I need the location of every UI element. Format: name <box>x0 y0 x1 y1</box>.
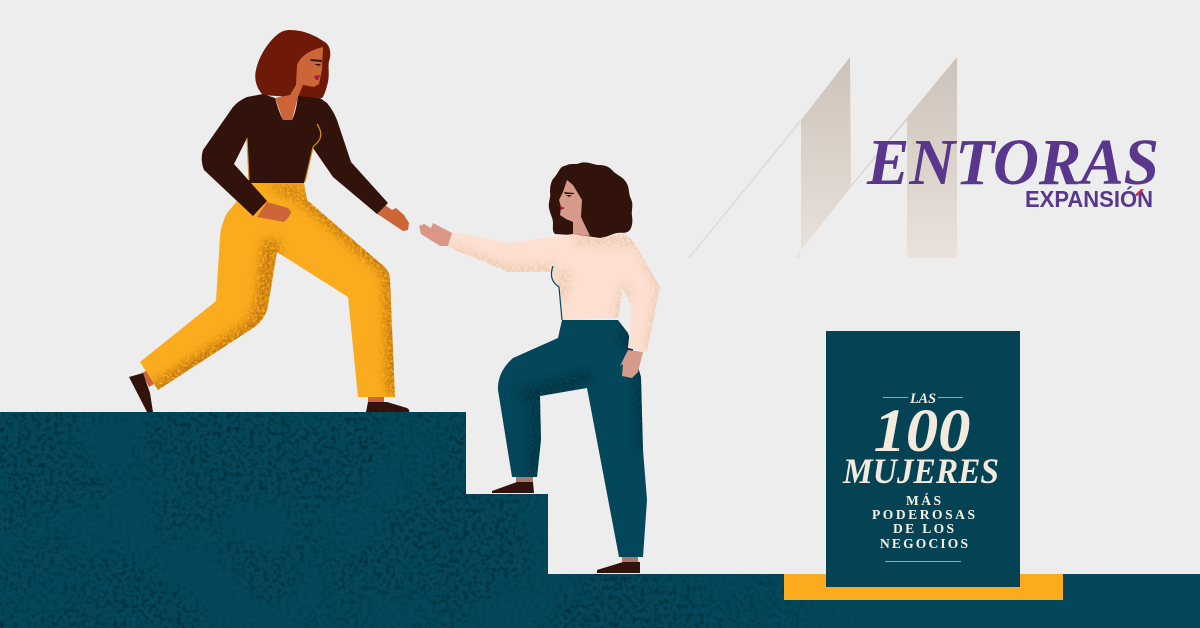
sweater speckle <box>450 240 662 350</box>
back shoe <box>129 373 153 412</box>
hair <box>549 162 632 238</box>
logo wordmark: EXPANSIÓN: EXPANSIÓN <box>1025 185 1153 212</box>
pants shading <box>520 330 645 478</box>
black top <box>202 94 388 216</box>
right hand <box>376 205 409 231</box>
card subtitle <box>872 493 975 551</box>
decorative rules <box>883 398 963 562</box>
card title: MUJERES: MUJERES <box>842 451 999 491</box>
logo monogram M <box>688 57 957 258</box>
logo wordmark: ENTORAS: ENTORAS <box>866 126 1159 199</box>
card subtitle: MÁS <box>906 493 941 508</box>
card title: 100: 100 <box>874 398 970 465</box>
card subtitle: PODEROSAS <box>872 507 975 522</box>
card subtitle: NEGOCIOS <box>880 536 968 551</box>
facial features <box>310 59 322 80</box>
face and neck <box>559 180 590 236</box>
left hand <box>257 202 291 222</box>
illustration: woman reaching down <box>419 162 662 573</box>
step shoe <box>492 482 534 493</box>
top seam lines <box>247 124 321 182</box>
pants shading <box>155 184 396 395</box>
sweater <box>448 232 660 352</box>
ankle front <box>516 477 533 483</box>
front shoe <box>366 402 409 412</box>
card subtitle: DE LOS <box>893 521 954 536</box>
pants <box>140 183 395 397</box>
face and neck <box>275 47 323 120</box>
back ankle <box>142 371 154 387</box>
illustration: woman on top step <box>129 30 409 412</box>
front ankle <box>368 397 384 403</box>
facial features <box>560 192 574 210</box>
bust line <box>551 266 562 320</box>
ankle back <box>622 557 638 563</box>
book card <box>826 331 1020 587</box>
pants <box>498 320 647 557</box>
hair <box>255 30 330 98</box>
standing shoe <box>597 562 640 573</box>
card title: LAS: LAS <box>909 391 936 407</box>
hip hand <box>620 350 643 378</box>
yellow plinth <box>784 574 1063 600</box>
reaching hand <box>419 223 452 246</box>
stairs <box>0 412 1200 628</box>
